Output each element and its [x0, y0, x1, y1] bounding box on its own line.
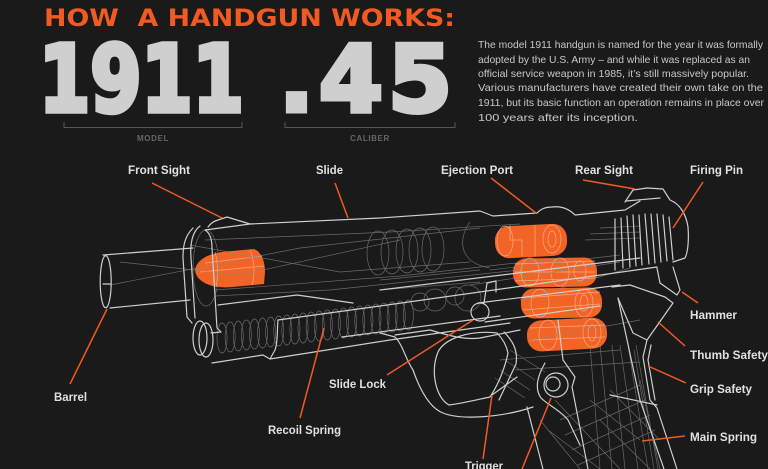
part labels: Thumb Safety: [690, 348, 768, 362]
barrel: [100, 256, 111, 308]
caliber block: .45: [279, 26, 457, 133]
part labels: Recoil Spring: [268, 423, 341, 437]
caliber block: CALIBER: [350, 134, 390, 143]
part labels: Slide Lock: [329, 377, 386, 391]
leader lines: [70, 178, 703, 469]
part labels: Barrel: [54, 390, 87, 404]
intro paragraph: official service weapon in 1985, it’s still massively popular.: [478, 69, 749, 80]
part labels: Front Sight: [128, 163, 190, 177]
intro paragraph: [478, 40, 765, 124]
grip outline: [558, 320, 588, 469]
part labels: Ejection Port: [441, 163, 513, 177]
intro paragraph: 1911, but its basic function an operation remains in place over: [478, 98, 765, 109]
cartridge interior lines: [200, 225, 605, 350]
part labels: Slide: [316, 163, 343, 177]
frame rail: [278, 267, 657, 320]
faint internal lines: [110, 222, 660, 469]
title: HOW A HANDGUN WORKS:: [44, 4, 455, 32]
slide stop: [471, 303, 489, 321]
part labels: [54, 163, 768, 469]
trigger pivot: [544, 373, 568, 397]
part labels: Hammer: [690, 308, 737, 322]
part labels: Grip Safety: [690, 382, 752, 396]
intro paragraph: Various manufacturers have created their own take on the: [478, 83, 763, 94]
model number block: MODEL: [137, 134, 169, 143]
intro paragraph: The model 1911 handgun is named for the year it was formally: [478, 40, 764, 51]
intro paragraph: adopted by the U.S. Army – and while it was replaced as an: [478, 55, 750, 66]
part labels: Main Spring: [690, 430, 757, 444]
orange cartridges: [195, 223, 608, 352]
pistol diagram: [100, 188, 688, 469]
grip safety: [612, 285, 673, 340]
recoil plug: [193, 321, 207, 355]
part labels: Firing Pin: [690, 163, 743, 177]
slide outline: [208, 201, 640, 227]
slide serrations: [615, 214, 673, 270]
model number block: 1911: [39, 26, 244, 133]
hammer: [657, 267, 680, 295]
part labels: Rear Sight: [575, 163, 633, 177]
bright outlines: [100, 188, 688, 469]
trigger guard: [380, 333, 533, 417]
intro paragraph: 100 years after its inception.: [478, 113, 638, 124]
